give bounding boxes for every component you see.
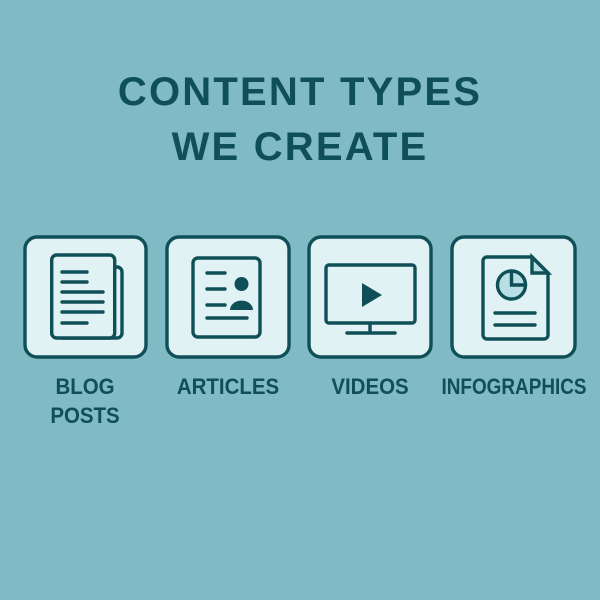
title (118, 70, 482, 169)
label: infographics: INFOGRAPHICS (441, 374, 587, 399)
card: videos (309, 237, 431, 357)
label: blog posts: POSTS (50, 403, 120, 428)
label: articles: ARTICLES (177, 374, 279, 399)
card: articles (167, 237, 289, 357)
label: videos: VIDEOS (331, 374, 409, 399)
label: blog posts: BLOG (55, 374, 115, 399)
label: blog posts (50, 374, 120, 428)
card: infographics (452, 237, 575, 357)
card: blog posts (25, 237, 146, 357)
title: WE CREATE (172, 125, 428, 169)
title: CONTENT TYPES (118, 70, 482, 114)
